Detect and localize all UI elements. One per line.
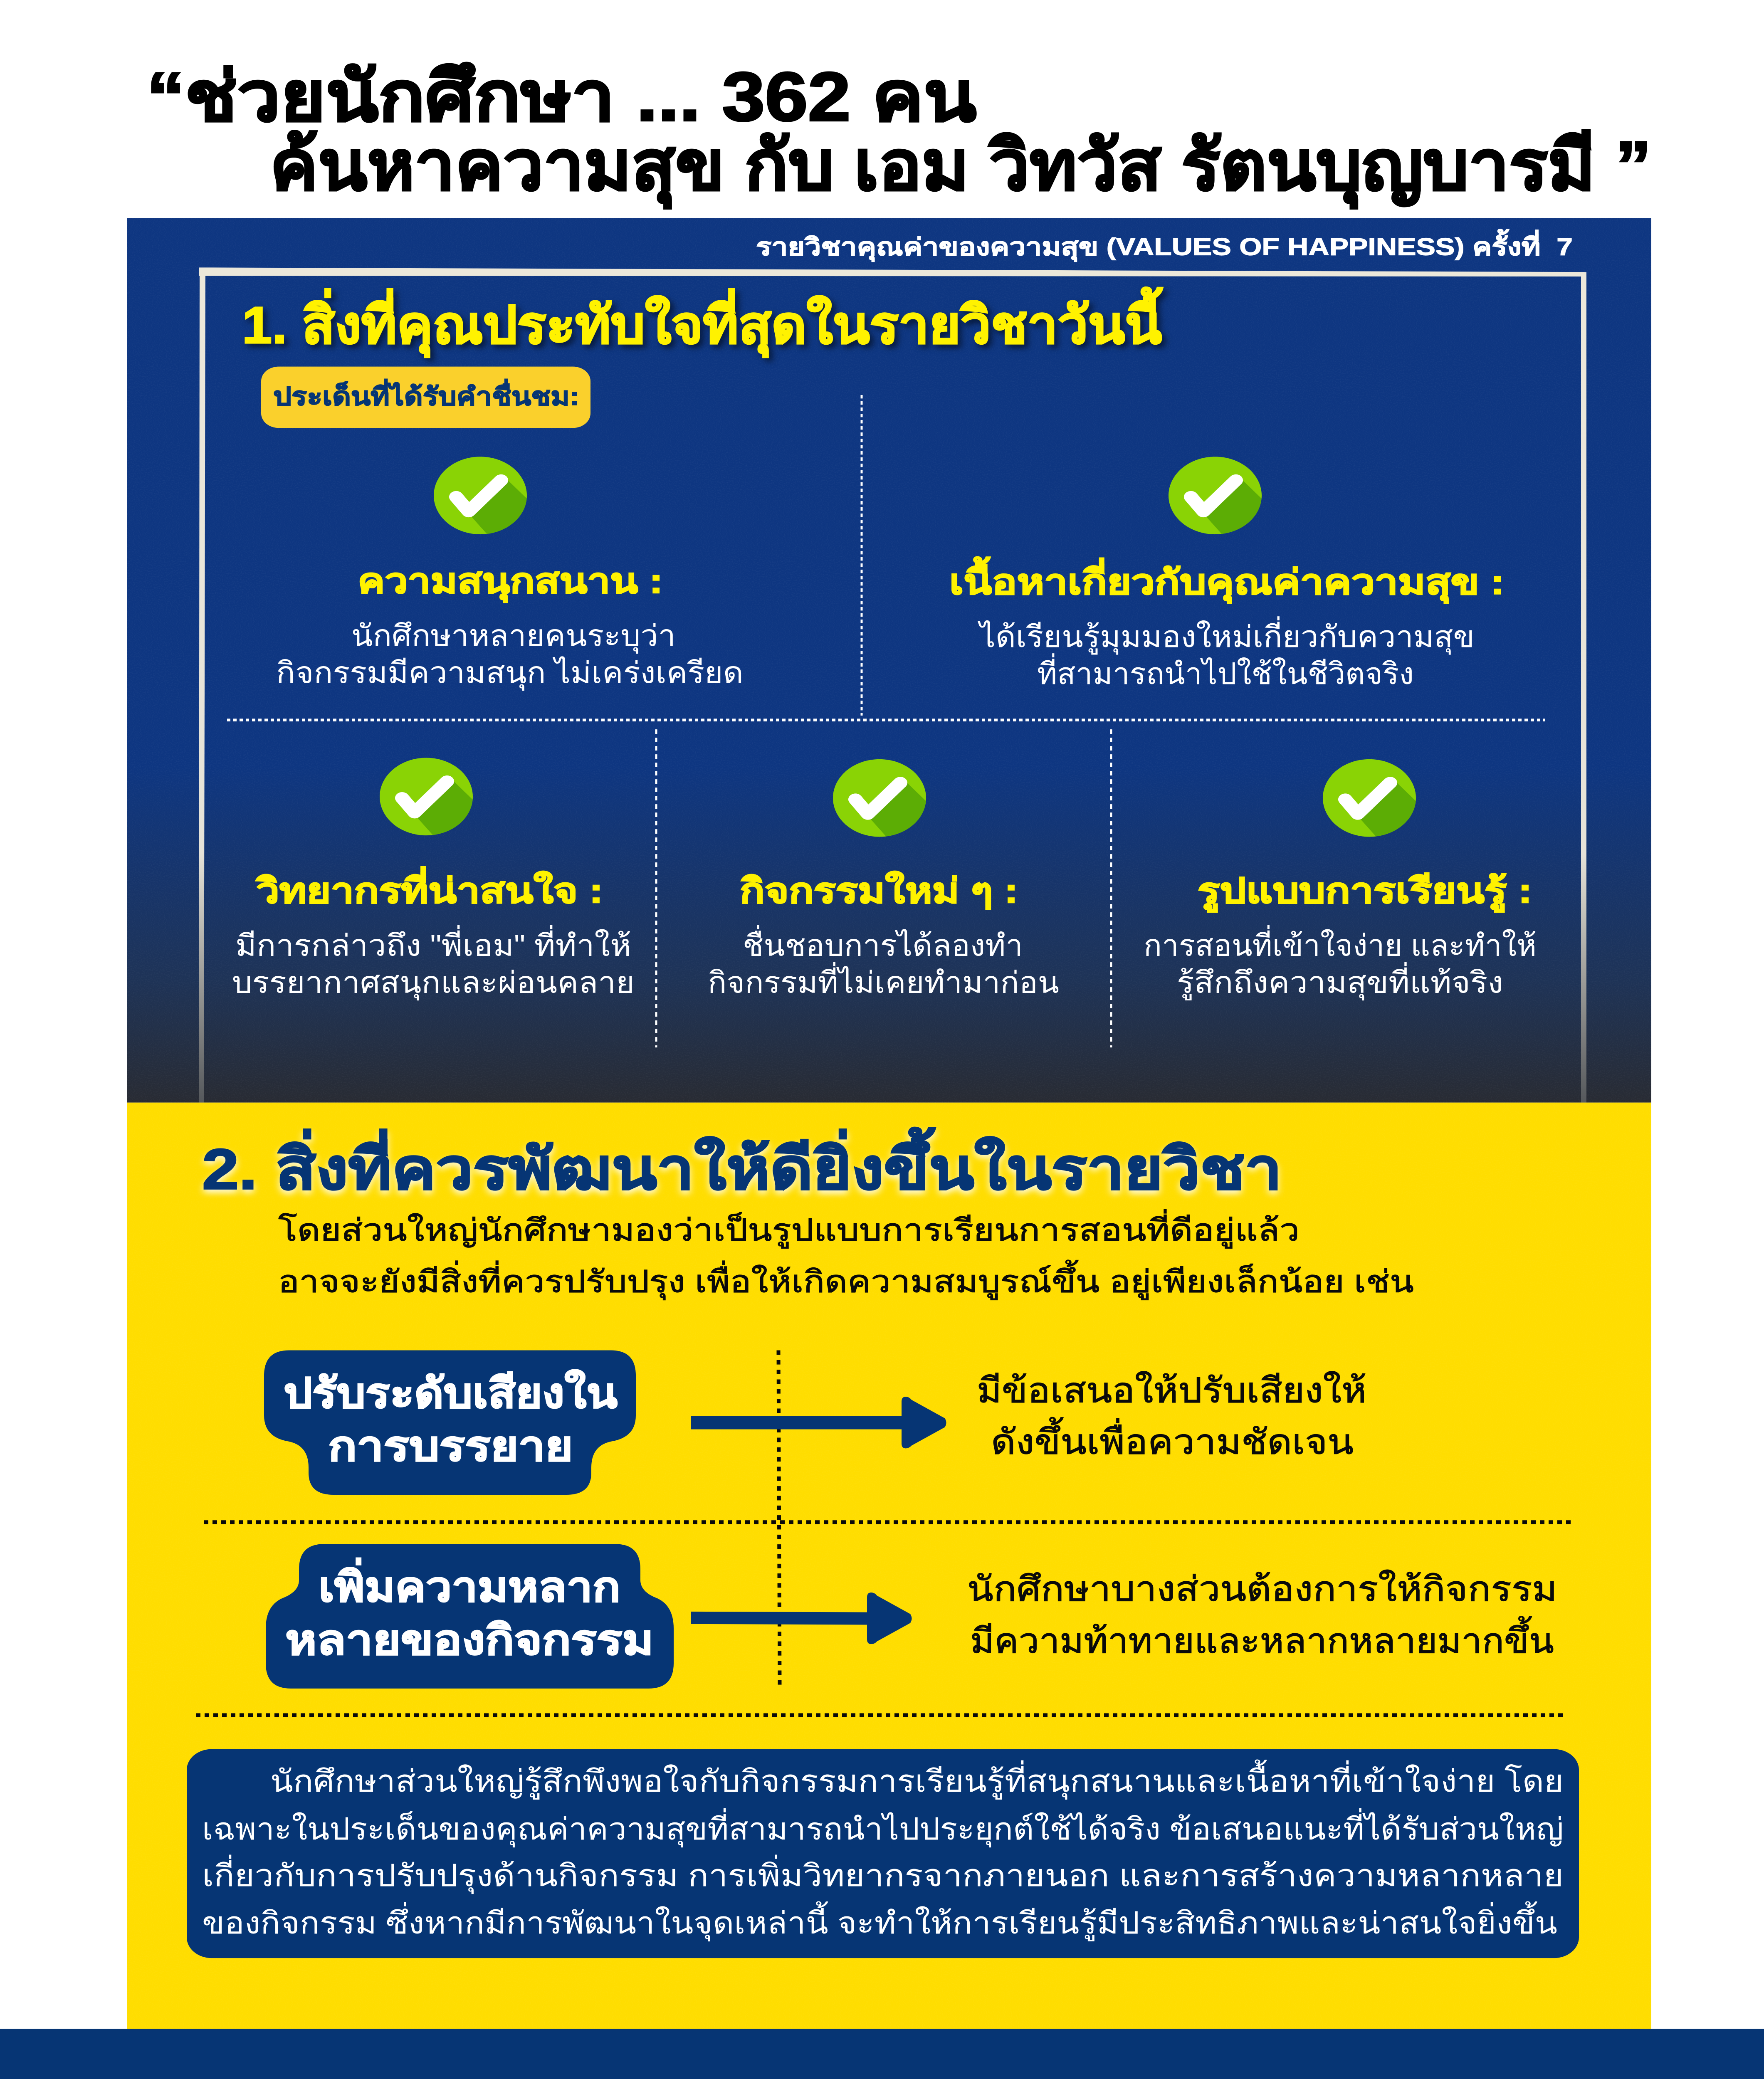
summary box: ของกิจกรรม ซึ่งหากมีการพัฒนาในจุดเหล่านี้ จะทำให้การเรียนรู้มีประสิทธิภาพและน่าสนใจยิ่งขึ้น (202, 1901, 1557, 1942)
item: fun: นักศึกษาหลายคนระบุว่า (351, 619, 676, 654)
icon: check (833, 759, 934, 843)
intro text: อาจจะยังมีสิ่งที่ควรปรับปรุง เพื่อให้เกิดความสมบูรณ์ขึ้น อยู่เพียงเล็กน้อย เช่น (278, 1260, 1414, 1300)
summary box: นักศึกษาส่วนใหญ่รู้สึกพึงพอใจกับกิจกรรมการเรียนรู้ที่สนุกสนานและเนื้อหาที่เข้าใจง่าย โดย (270, 1759, 1564, 1800)
intro text (278, 1209, 1414, 1300)
intro text: โดยส่วนใหญ่นักศึกษามองว่าเป็นรูปแบบการเรียนการสอนที่ดีอยู่แล้ว (278, 1209, 1300, 1248)
label box: adjust volume: การบรรยาย (328, 1423, 573, 1469)
item: new activities: กิจกรรมใหม่ ๆ : (740, 871, 1018, 910)
item: content on values of happiness (949, 457, 1505, 690)
note: volume (977, 1371, 1366, 1462)
icon: check (434, 457, 534, 541)
icon: check (1323, 759, 1423, 843)
item: fun: กิจกรรมมีความสนุก ไม่เคร่งเครียด (276, 656, 744, 691)
panel: what impressed students (127, 218, 1651, 1103)
item: fun (276, 457, 744, 691)
arrow: volume (691, 1397, 946, 1448)
title (146, 58, 1651, 209)
item: interesting speaker (232, 758, 635, 1001)
item: new activities: ชื่นชอบการได้ลองทำ (743, 925, 1023, 962)
label box: more variety: หลายของกิจกรรม (285, 1617, 654, 1663)
panel: improvements (127, 1103, 1651, 2029)
label box: adjust volume: ปรับระดับเสียงใน (284, 1370, 618, 1417)
item: new activities: กิจกรรมที่ไม่เคยทำมาก่อน (708, 962, 1059, 999)
item: learning format (1144, 759, 1537, 1001)
badge: praised points (261, 367, 590, 428)
item: content on values of happiness: ที่สามารถนำไปใช้ในชีวิตจริง (1037, 654, 1414, 690)
note: variety: มีความท้าทายและหลากหลายมากขึ้น (970, 1616, 1554, 1660)
arrow: variety (691, 1593, 912, 1644)
note: volume: มีข้อเสนอให้ปรับเสียงให้ (977, 1371, 1366, 1410)
title: “ช่วยนักศึกษา ... 362 คน (146, 58, 976, 136)
note: volume: ดังขึ้นเพื่อความชัดเจน (991, 1417, 1354, 1462)
heading 2: 2. สิ่งที่ควรพัฒนาให้ดียิ่งขึ้นในรายวิชา (202, 1127, 1282, 1201)
note: variety: นักศึกษาบางส่วนต้องการให้กิจกรรม (967, 1570, 1557, 1608)
item: interesting speaker: มีการกล่าวถึง "พี่เอม" ที่ทำให้ (235, 925, 631, 962)
icon: check (380, 758, 480, 842)
item: learning format: รูปแบบการเรียนรู้ : (1198, 872, 1532, 912)
item: new activities (708, 759, 1059, 999)
summary box: เฉพาะในประเด็นของคุณค่าความสุขที่สามารถนำไปประยุกต์ใช้ได้จริง ข้อเสนอแนะที่ได้รับส่วนใหญ่ (202, 1808, 1564, 1848)
heading 1: 1. สิ่งที่คุณประทับใจที่สุดในรายวิชาวันนี้ (242, 287, 1163, 358)
item: content on values of happiness: เนื้อหาเกี่ยวกับคุณค่าความสุข : (949, 557, 1505, 604)
summary box: เกี่ยวกับการปรับปรุงด้านกิจกรรม การเพิ่มวิทยากรจากภายนอก และการสร้างความหลากหลาย (202, 1854, 1564, 1894)
label box: more variety (266, 1544, 674, 1689)
label box: more variety: เพิ่มความหลาก (319, 1558, 620, 1610)
item: learning format: การสอนที่เข้าใจง่าย และทำให้ (1144, 925, 1537, 962)
label box: adjust volume (264, 1351, 636, 1495)
item: interesting speaker: บรรยากาศสนุกและผ่อนคลาย (232, 965, 635, 1001)
icon: check (1169, 457, 1269, 541)
footer bar (0, 2029, 1764, 2079)
item: interesting speaker: วิทยากรที่น่าสนใจ : (256, 866, 603, 910)
item: content on values of happiness: ได้เรียนรู้มุมมองใหม่เกี่ยวกับความสุข (977, 616, 1475, 655)
note: variety (967, 1570, 1557, 1660)
item: learning format: รู้สึกถึงความสุขที่แท้จริง (1177, 962, 1503, 1001)
summary box (187, 1749, 1579, 1958)
item: fun: ความสนุกสนาน : (358, 562, 663, 602)
session label: รายวิชาคุณค่าของความสุข (VALUES OF HAPPINESS) ครั้งที่ 7 (756, 229, 1573, 262)
badge: praised points: ประเด็นที่ได้รับคำชื่นชม: (273, 379, 579, 411)
